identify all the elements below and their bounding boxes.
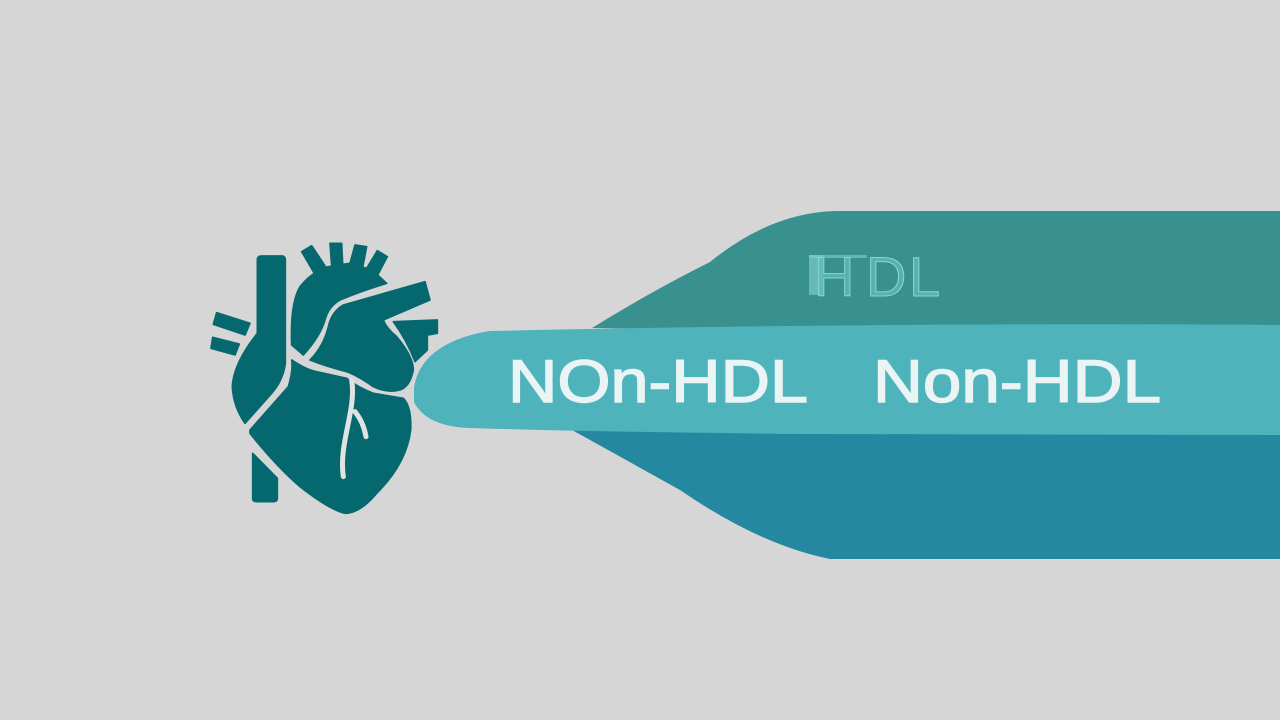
pulmonary vein [393, 320, 437, 362]
coronary artery [342, 380, 366, 477]
small vessel lower [211, 337, 239, 355]
label: Non-HDL left: NOn-HDL [508, 348, 808, 415]
aortic arch [291, 243, 387, 355]
vena cava and right atrium [232, 256, 285, 423]
icon: anatomical heart [211, 243, 437, 513]
label: Non-HDL right: Non-HDL [873, 348, 1161, 415]
label: HDL: HDL [814, 245, 940, 308]
band: top HDL [592, 211, 1280, 335]
ventricles [250, 360, 411, 513]
inferior vena cava [253, 453, 277, 502]
pulmonary artery and left atrium [310, 282, 430, 391]
band: middle Non-HDL [414, 324, 1280, 435]
band: bottom [572, 425, 1280, 559]
small vessel upper [213, 313, 250, 335]
